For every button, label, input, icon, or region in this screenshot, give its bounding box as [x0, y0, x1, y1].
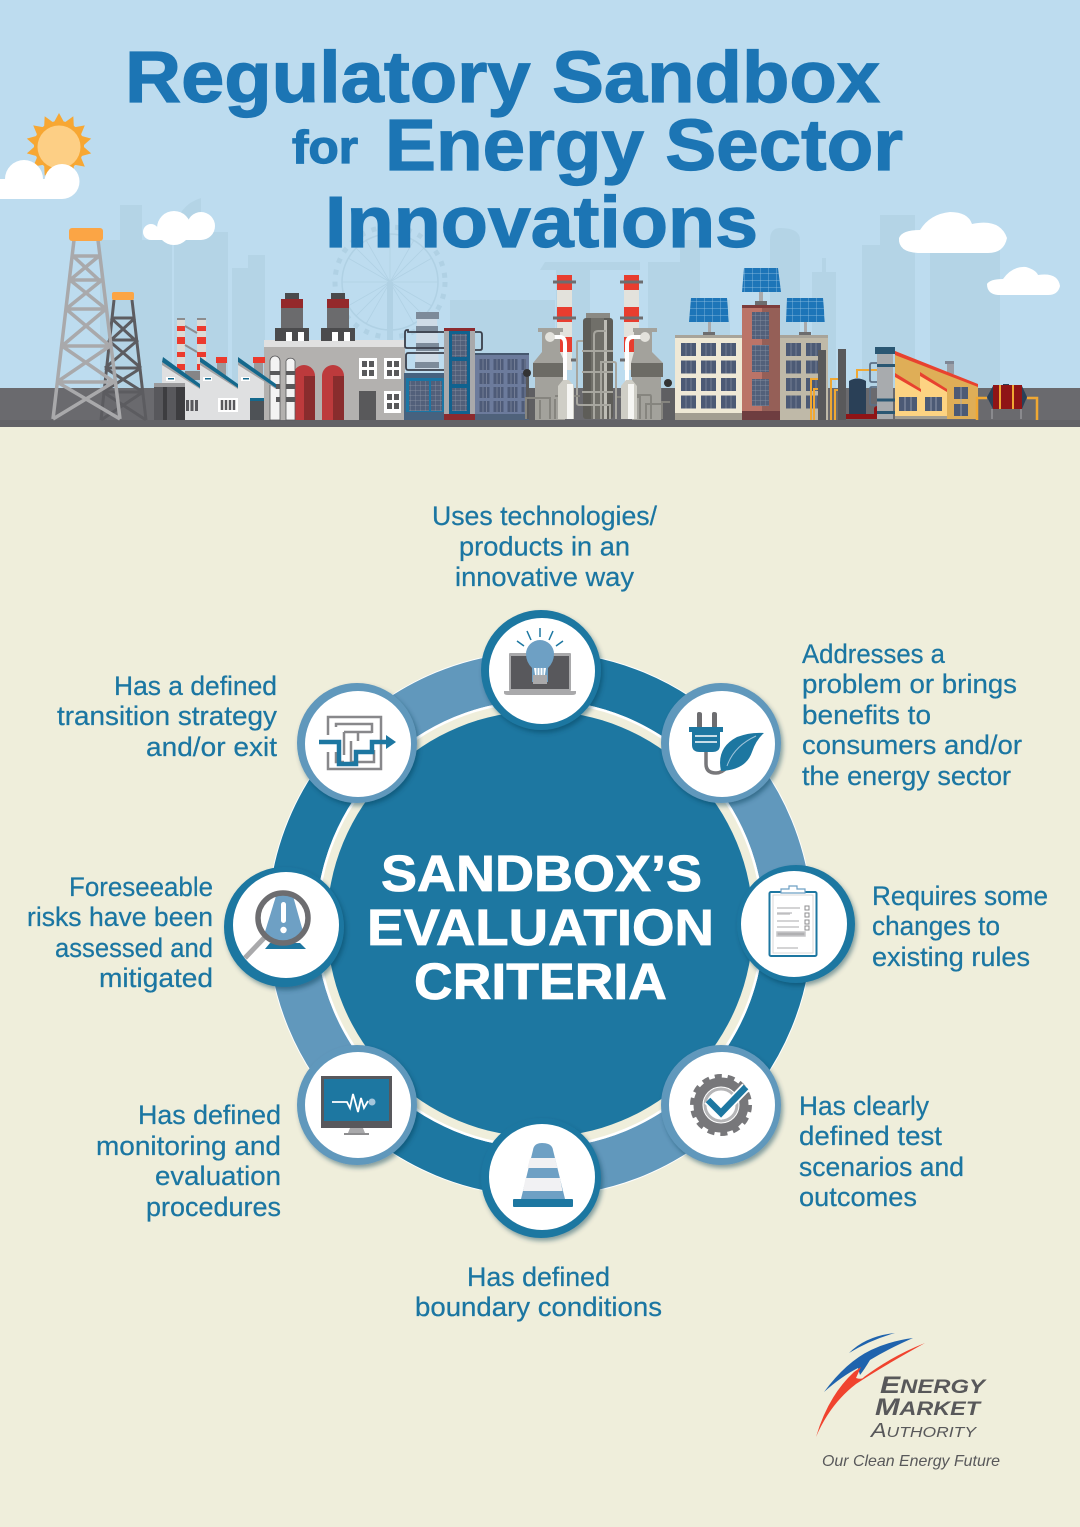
centre heading: SANDBOX’S	[381, 845, 702, 902]
title line 3: Innovations	[325, 183, 758, 263]
icon: sun	[25, 113, 93, 179]
label: risks: assessed and	[55, 933, 213, 963]
title line 2: Energy Sector	[385, 106, 903, 186]
label: monitoring	[96, 1100, 281, 1222]
label: risks: risks have been	[27, 902, 213, 932]
label: transition strategy: and/or exit	[146, 732, 278, 762]
label: problem or benefits: problem or brings	[802, 669, 1017, 699]
label: risks	[27, 872, 213, 993]
node: plug and leaf (top right)	[661, 683, 781, 803]
illustration: power plant building	[264, 293, 405, 420]
node: clipboard (right)	[737, 865, 855, 983]
logo: Energy Market Authority: MARKET	[875, 1394, 982, 1421]
label: risks: mitigated	[99, 963, 213, 993]
node: laptop with light bulb (top)	[481, 610, 601, 730]
chart: criteria ring	[267, 651, 813, 1197]
illustration: apartment building with solar panels	[675, 268, 828, 420]
label: rule changes: existing rules	[872, 942, 1030, 972]
label: boundary conditions: boundary conditions	[415, 1292, 662, 1322]
ground strip	[0, 388, 1080, 420]
icon: cloud far right	[987, 267, 1060, 295]
sky	[0, 0, 1080, 388]
centre heading	[367, 845, 714, 1010]
node: gear with check mark (bottom right)	[661, 1045, 781, 1165]
label: test scenarios: outcomes	[799, 1182, 917, 1212]
label: transition strategy	[57, 671, 278, 762]
label: rule changes: Requires some	[872, 881, 1048, 911]
label: monitoring: procedures	[146, 1192, 281, 1222]
label: test scenarios: Has clearly	[799, 1091, 929, 1121]
label: boundary conditions	[415, 1262, 662, 1322]
illustration: oil derricks	[53, 228, 146, 420]
label: test scenarios: scenarios and	[799, 1152, 964, 1182]
label: test scenarios: defined test	[799, 1121, 943, 1151]
skyline silhouettes	[100, 198, 1000, 388]
centre heading: CRITERIA	[414, 953, 667, 1010]
node: traffic cone (bottom)	[481, 1118, 601, 1238]
logo tagline: Our Clean Energy Future	[822, 1453, 1000, 1470]
label: monitoring: monitoring and	[96, 1131, 281, 1161]
label: rule changes: changes to	[872, 911, 1000, 941]
header panel: city skyline scene	[0, 0, 1080, 427]
label: innovative use: innovative way	[455, 562, 634, 592]
icon: cloud right	[899, 212, 1007, 253]
label: risks: Foreseeable	[69, 872, 213, 902]
logo: Energy Market Authority	[816, 1333, 1000, 1470]
central disc	[327, 711, 753, 1137]
ferris wheel silhouette	[335, 227, 445, 388]
node: monitor with heartbeat (bottom left)	[297, 1045, 417, 1165]
logo swooshes	[816, 1333, 925, 1437]
ring segments alternating dark and light	[292, 676, 788, 1172]
label: monitoring: evaluation	[155, 1161, 281, 1191]
label: problem or benefits: the energy sector	[802, 761, 1011, 791]
label: test scenarios	[799, 1091, 964, 1212]
label: transition strategy: transition strategy	[57, 701, 278, 731]
title line 1: Regulatory Sandbox	[125, 38, 880, 118]
title word: for: for	[292, 121, 358, 173]
label: innovative use: Uses technologies/	[432, 501, 657, 531]
label: rule changes	[872, 881, 1048, 972]
label: problem or benefits: Addresses a	[802, 639, 946, 669]
label: transition strategy: Has a defined	[114, 671, 277, 701]
title	[125, 38, 903, 263]
label: problem or benefits: benefits to	[802, 700, 931, 730]
icon: cloud left	[0, 160, 80, 199]
label: boundary conditions: Has defined	[467, 1262, 610, 1292]
node: warning under magnifier (left)	[224, 867, 344, 987]
label: problem or benefits: consumers and/or	[802, 730, 1022, 760]
label: innovative use: products in an	[459, 532, 630, 562]
logo wordmark: ENERGY	[880, 1372, 988, 1399]
illustration: stacks, tank and pipes	[811, 347, 895, 420]
illustration: yellow factory	[895, 351, 978, 419]
node: maze with arrow (top left)	[297, 683, 417, 803]
illustration: refinery with chimneys	[523, 275, 675, 420]
label: innovative use	[432, 501, 657, 592]
illustration: red storage tank	[977, 384, 1037, 420]
logo: Energy Market Authority: AUTHORITY	[870, 1420, 977, 1442]
centre heading: EVALUATION	[367, 899, 714, 956]
label: monitoring: Has defined	[138, 1100, 281, 1130]
illustration: blue industrial block	[404, 312, 529, 420]
label: problem or benefits	[802, 639, 1022, 791]
ring outline	[267, 651, 813, 1197]
illustration: sawtooth factory	[154, 318, 276, 420]
icon: cloud centre	[143, 211, 215, 245]
